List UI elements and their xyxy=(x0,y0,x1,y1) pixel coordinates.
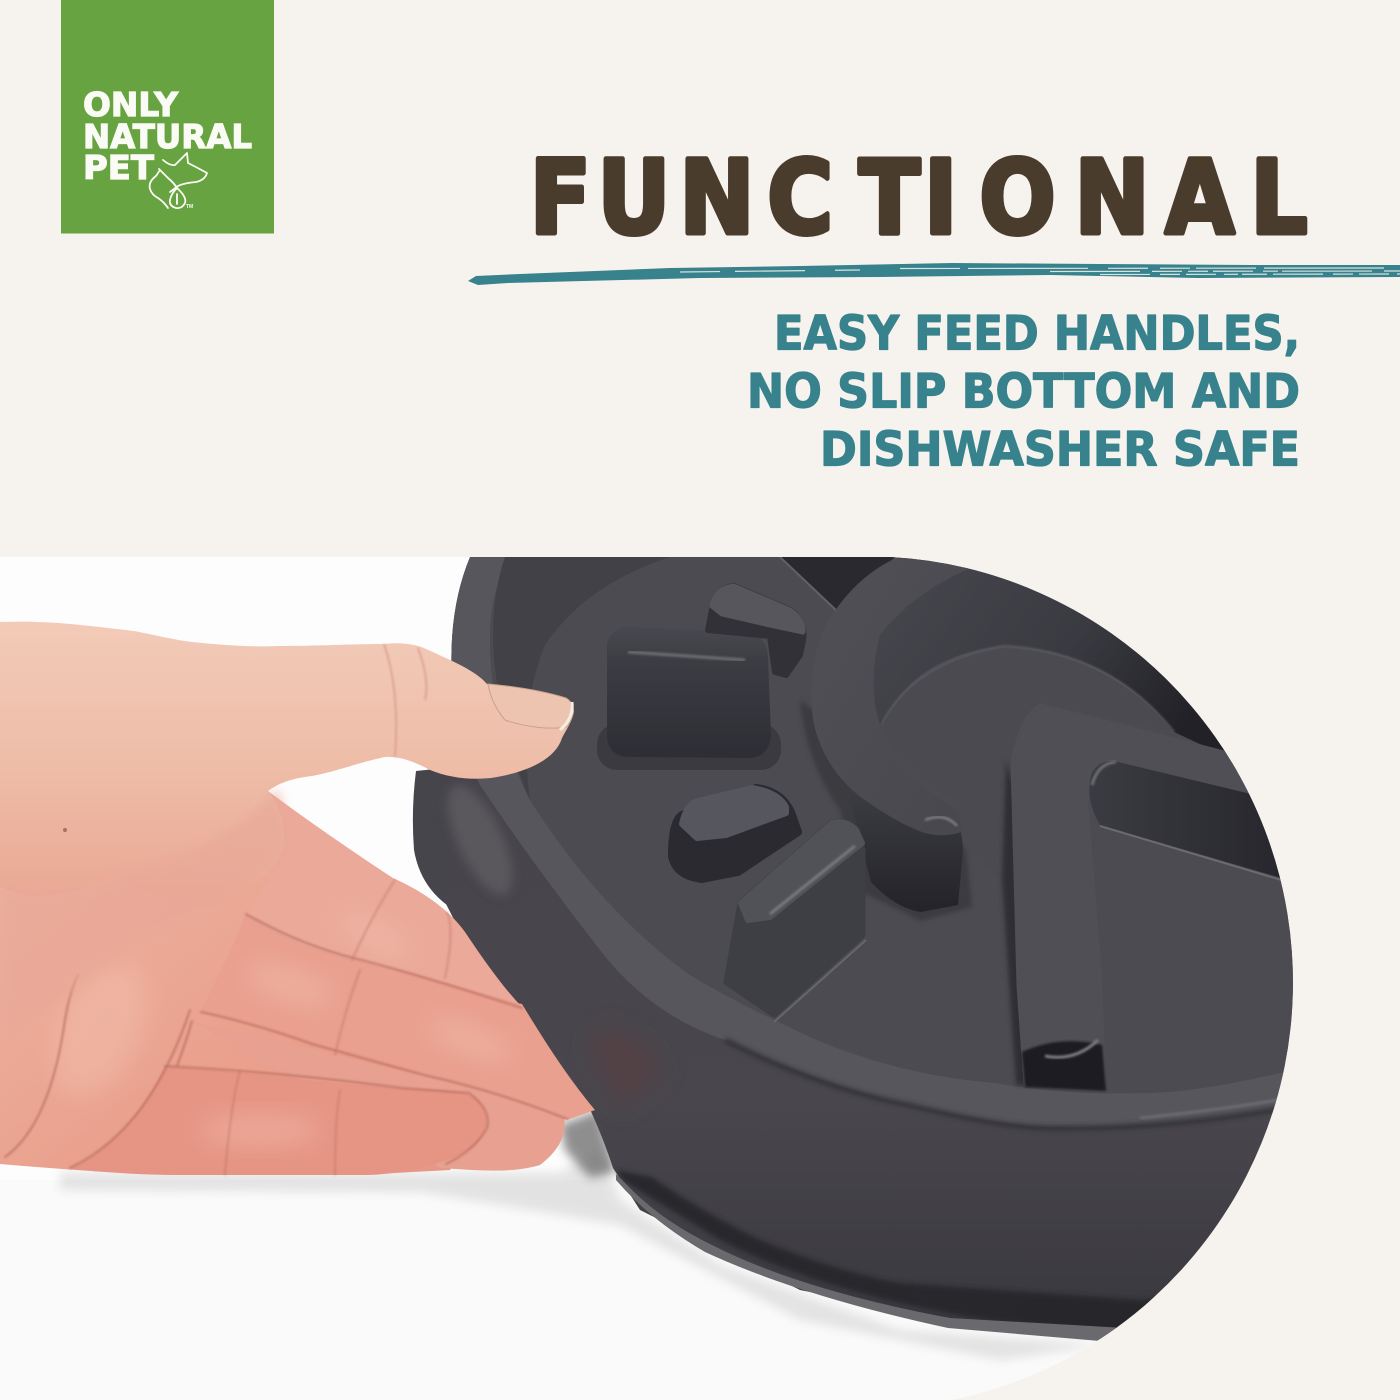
wall socket shadow xyxy=(800,700,972,921)
logo wordmark: NATURAL xyxy=(83,117,252,156)
heading: FUNCTIONAL: FUNCTIONAL xyxy=(530,139,1308,257)
wall top face xyxy=(811,559,976,835)
bowl base lip left xyxy=(412,770,446,904)
rim highlight line xyxy=(1140,1098,1290,1118)
subheading: product features: DISHWASHER SAFE xyxy=(820,422,1300,478)
logo wordmark xyxy=(83,85,252,187)
body highlight left xyxy=(447,785,512,894)
block: front rectangle xyxy=(597,632,781,770)
L wall foot shadow xyxy=(1022,1041,1106,1091)
upper right recess xyxy=(874,567,1229,758)
skin mottling xyxy=(34,903,517,1146)
pill: back xyxy=(708,586,803,675)
curved wall xyxy=(800,559,976,921)
bowl foot edge xyxy=(616,1174,1125,1341)
logo wordmark: ONLY xyxy=(83,85,179,124)
palm base xyxy=(0,848,454,1175)
bowl rim band xyxy=(451,557,1300,1127)
L wall recess shadow xyxy=(1089,761,1288,880)
subheading: product features: NO SLIP BOTTOM AND xyxy=(747,364,1300,420)
pill: middle xyxy=(672,788,798,879)
finger: middle xyxy=(312,948,595,1120)
block: front slanted xyxy=(727,822,866,1022)
logo trademark: TM xyxy=(186,204,193,210)
L-shaped wall xyxy=(1000,744,1281,1092)
icon: dog and cat with leaf xyxy=(150,153,207,208)
skin mark xyxy=(63,828,67,832)
subheading: product features xyxy=(747,306,1300,478)
inner wall upper left xyxy=(493,557,670,800)
L wall floor highlight xyxy=(1100,826,1288,882)
bowl floor xyxy=(892,557,1293,1072)
floor shadows xyxy=(60,1110,1100,1360)
thumb and hand back xyxy=(0,622,574,907)
finger: little xyxy=(71,1066,486,1175)
inner circle rim highlight xyxy=(881,646,1174,732)
inner circle floor xyxy=(884,696,1173,732)
dark gap behind curved wall xyxy=(780,557,895,612)
L wall shadow xyxy=(1000,765,1024,1086)
finger creases xyxy=(5,880,567,1175)
thumbnail xyxy=(488,684,573,728)
L wall face xyxy=(1010,744,1248,1086)
body reddish reflection from hand xyxy=(602,1040,648,1088)
finger: index xyxy=(268,791,518,1004)
hand xyxy=(0,622,595,1175)
thumb lower palm shading xyxy=(0,789,285,1050)
photo white backdrop xyxy=(0,557,617,1180)
bowl outer body xyxy=(440,557,1320,1342)
wall end face xyxy=(862,832,963,912)
thumb knuckle crease xyxy=(384,644,426,757)
brush dry streaks xyxy=(680,268,1400,274)
rim shadow line xyxy=(725,1040,1300,1128)
logo wordmark: PET xyxy=(83,148,154,187)
subheading: product features: EASY FEED HANDLES, xyxy=(774,306,1300,362)
photo: hand holding slow-feeder bowl xyxy=(0,557,1400,1400)
bowl xyxy=(413,557,1320,1342)
logo: Only Natural Pet xyxy=(61,0,274,234)
bowl foot groove xyxy=(616,1170,1200,1335)
finger: ring xyxy=(417,1079,565,1171)
brush stroke divider xyxy=(468,263,1400,285)
